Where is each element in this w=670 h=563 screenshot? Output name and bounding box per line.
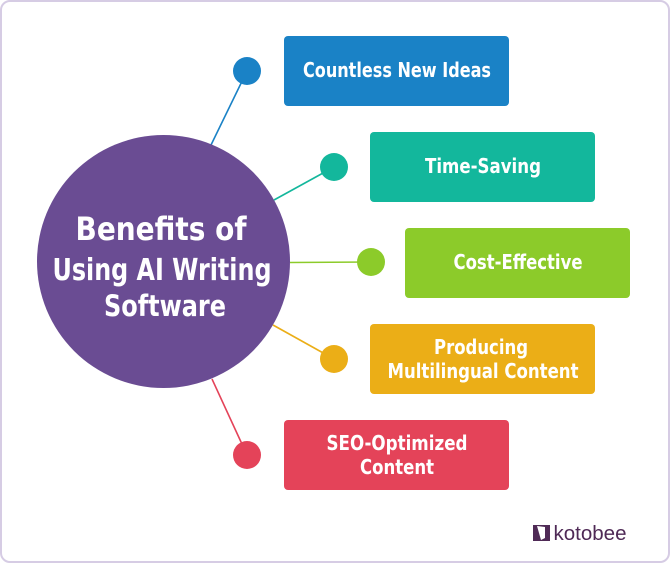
- box: countless new ideas: Countless New Ideas: [303, 58, 491, 82]
- node: amber dot: [320, 345, 348, 373]
- connector: seo-optimized: [212, 379, 247, 455]
- box: producing multilingual content: Producing: [434, 335, 528, 359]
- box: seo-optimized content: Content: [360, 455, 434, 479]
- central circle: benefits of using AI writing software: Software: [104, 289, 226, 323]
- central circle: benefits of using AI writing software: Using AI Writing: [52, 253, 272, 288]
- node: teal dot: [320, 153, 348, 181]
- box: countless new ideas: [284, 36, 509, 106]
- connector: time-saving: [274, 167, 334, 200]
- box: seo-optimized content: SEO-Optimized: [326, 431, 468, 455]
- logo: kotobee: kotobee: [554, 523, 626, 545]
- box: time-saving: Time-Saving: [425, 154, 541, 178]
- box: producing multilingual content: [370, 324, 595, 394]
- connector: countless new ideas: [211, 71, 247, 145]
- connector: cost-effective: [290, 261, 371, 264]
- node: blue dot: [233, 57, 261, 85]
- node: red dot: [233, 441, 261, 469]
- central circle: benefits of using AI writing software: [37, 135, 290, 388]
- box: producing multilingual content: Multilingual Content: [388, 359, 579, 383]
- node: green dot: [357, 248, 385, 276]
- box: seo-optimized content: [284, 420, 509, 490]
- connector: multilingual content: [273, 325, 334, 359]
- box: cost-effective: [405, 228, 630, 298]
- box: cost-effective: Cost-Effective: [454, 250, 582, 274]
- box: time-saving: [370, 132, 595, 202]
- central circle: benefits of using AI writing software: Benefits of: [76, 210, 247, 248]
